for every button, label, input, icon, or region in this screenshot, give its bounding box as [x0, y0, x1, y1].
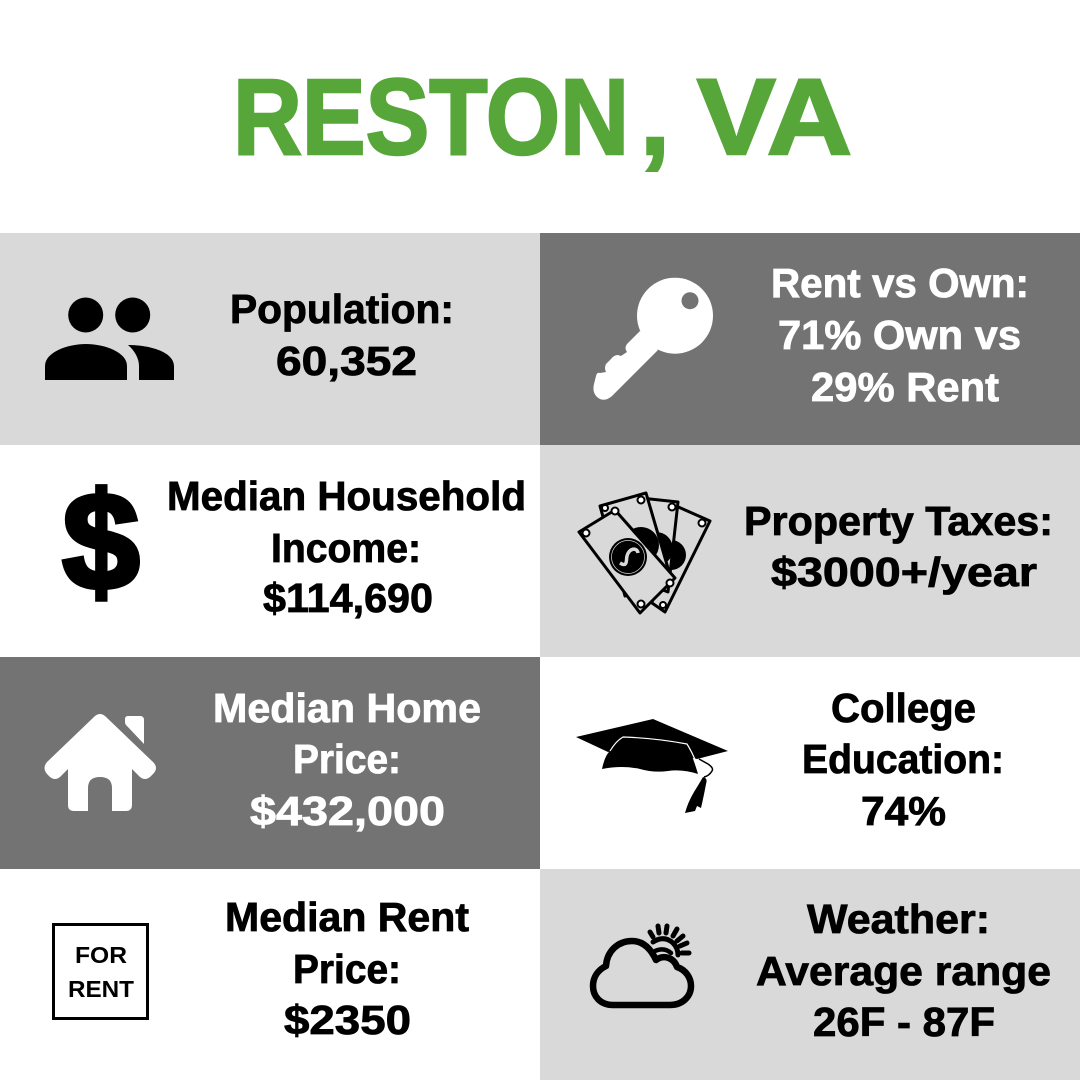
text: median home price: Price: — [293, 736, 401, 782]
title: VA — [697, 56, 852, 177]
text: median rent price: Price: — [293, 946, 401, 992]
icon: key — [593, 278, 713, 400]
panel: rent vs own — [540, 233, 1080, 445]
text: weather: Weather: — [807, 896, 990, 942]
text: college education — [802, 685, 1004, 834]
panel: weather — [540, 869, 1080, 1080]
text: population — [230, 286, 454, 384]
icon: for rent sign — [54, 924, 148, 1018]
text: median household income: $114,690 — [263, 575, 433, 621]
panel: median home price — [0, 657, 540, 869]
text: college education: College — [831, 685, 976, 731]
panel: property taxes — [540, 445, 1080, 657]
text: rent vs own — [771, 260, 1029, 410]
icon: for rent sign: FOR — [75, 942, 127, 968]
text: property taxes — [744, 498, 1053, 595]
text: property taxes: Property Taxes: — [744, 498, 1053, 544]
text: college education: Education: — [802, 736, 1004, 782]
text: college education: 74% — [861, 788, 946, 834]
icon: money bills — [579, 493, 710, 613]
title: , — [640, 56, 670, 177]
panel: median rent price — [0, 869, 540, 1080]
text: median home price — [213, 685, 481, 834]
text: median household income — [167, 473, 526, 621]
text: median rent price — [225, 894, 469, 1043]
text: rent vs own: Rent vs Own: — [771, 260, 1029, 306]
text: median rent price: Median Rent — [225, 894, 469, 940]
text: property taxes: $3000+/year — [771, 549, 1037, 595]
text: rent vs own: 71% Own vs — [778, 312, 1021, 358]
text: rent vs own: 29% Rent — [811, 364, 999, 410]
text: population: Population: — [230, 286, 454, 332]
text: weather — [756, 896, 1051, 1045]
icon: cloud and sun — [593, 926, 691, 1005]
panel: college education — [540, 657, 1080, 869]
text: median household income: Income: — [271, 525, 421, 571]
icon: for rent sign: RENT — [68, 976, 134, 1002]
icon: house — [44, 714, 156, 811]
text: population: 60,352 — [276, 338, 417, 384]
text: median home price: Median Home — [213, 685, 481, 731]
text: median home price: $432,000 — [250, 788, 445, 834]
text: weather: Average range — [756, 948, 1051, 994]
icon: dollar sign: $ — [62, 465, 140, 619]
text: weather: 26F - 87F — [813, 999, 995, 1045]
icon: graduation cap — [576, 719, 728, 813]
panel: median household income — [0, 445, 540, 657]
panel: population — [0, 233, 540, 445]
title: RESTON — [233, 56, 629, 177]
icon: people — [45, 298, 174, 380]
text: median rent price: $2350 — [284, 997, 411, 1043]
text: median household income: Median Household — [167, 473, 526, 519]
